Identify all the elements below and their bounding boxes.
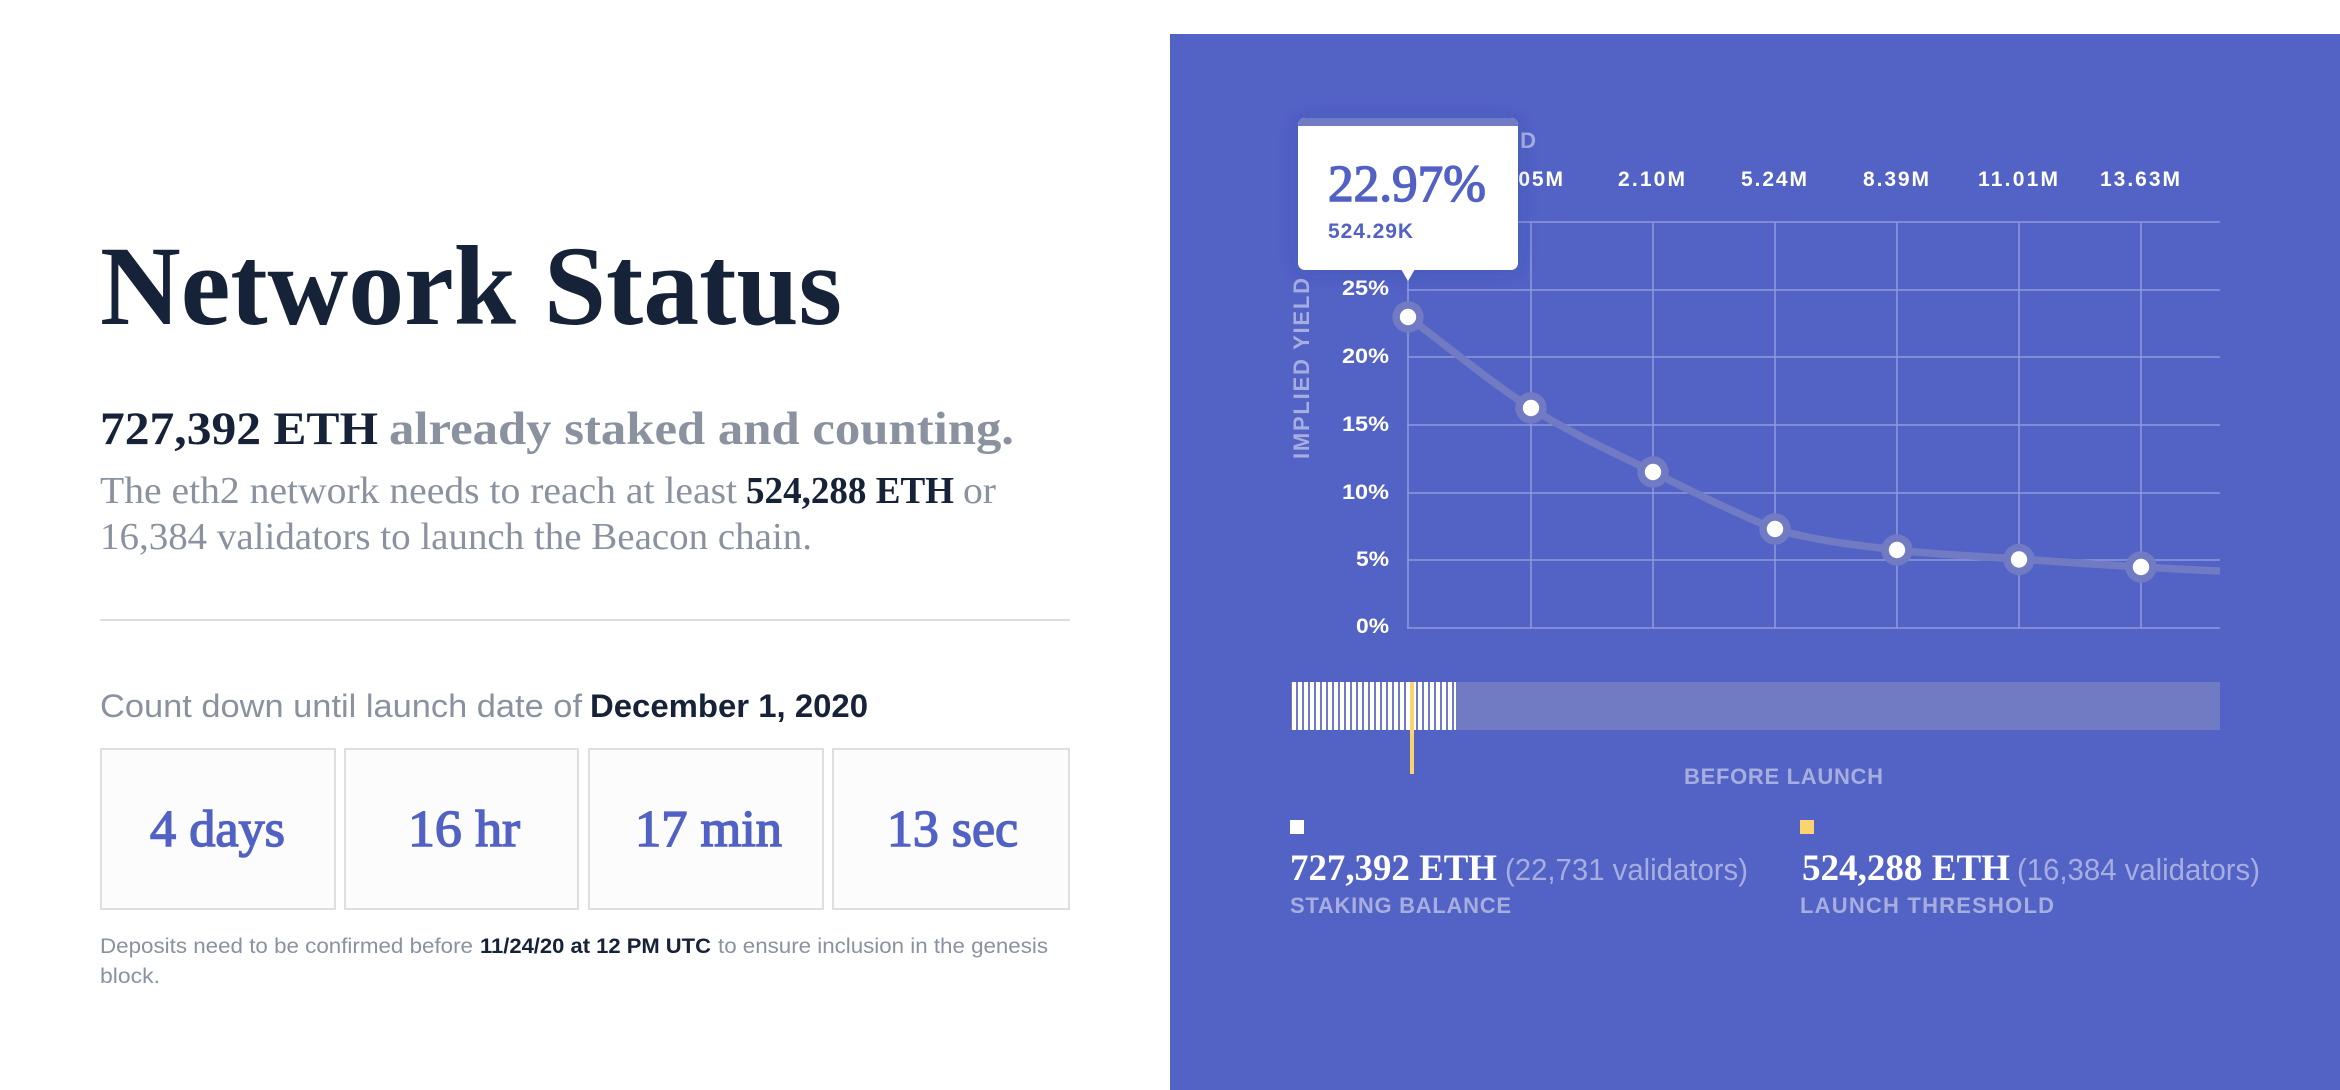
text block: deposit note: block. bbox=[100, 964, 160, 988]
text block: deposit note: to ensure inclusion in the genesis bbox=[718, 934, 1048, 958]
data points bbox=[1392, 301, 2157, 583]
countdown: minutes bbox=[589, 749, 823, 909]
legend: staking balance: 727,392 ETH bbox=[1290, 848, 1497, 889]
legend: staking balance: STAKING BALANCE bbox=[1290, 893, 1511, 918]
progress bar label: BEFORE LAUNCH bbox=[1684, 764, 1883, 789]
text block: deposit note bbox=[100, 934, 1048, 988]
panel: network status summary bbox=[100, 224, 1070, 988]
text block: deposit note: 11/24/20 at 12 PM UTC bbox=[480, 934, 711, 958]
countdown: seconds bbox=[833, 749, 1069, 909]
heading: countdown: Count down until launch date of bbox=[100, 688, 582, 724]
panel: yield chart bbox=[1170, 34, 2340, 1090]
legend: staking balance: (22,731 validators) bbox=[1505, 852, 1748, 887]
countdown: minutes: 17 min bbox=[635, 801, 782, 858]
text block: network requirement: 524,288 ETH bbox=[746, 470, 954, 512]
y axis labels: 0% bbox=[1356, 615, 1389, 638]
heading: staked amount: already staked and counting. bbox=[389, 403, 1014, 455]
y axis labels: 10% bbox=[1342, 481, 1389, 504]
text block: network requirement: or bbox=[963, 470, 996, 512]
legend: launch threshold: (16,384 validators) bbox=[2017, 852, 2260, 887]
legend: launch threshold: LAUNCH THRESHOLD bbox=[1800, 893, 2054, 918]
tooltip bbox=[1298, 118, 1518, 281]
y axis labels: 5% bbox=[1356, 548, 1389, 571]
heading: staked amount bbox=[100, 403, 1014, 455]
y axis labels: 15% bbox=[1342, 413, 1389, 436]
x axis labels: 5.24M bbox=[1741, 168, 1807, 191]
x axis labels bbox=[1497, 168, 2180, 191]
x axis title: TOTAL ETH STAKED bbox=[1300, 128, 1536, 153]
countdown: hours bbox=[345, 749, 578, 909]
y axis labels bbox=[1342, 277, 1389, 638]
tooltip: 524.29K bbox=[1328, 220, 1413, 243]
legend: staking balance bbox=[1290, 820, 1748, 918]
title: Network Status bbox=[100, 224, 842, 349]
legend: launch threshold: 524,288 ETH bbox=[1802, 848, 2010, 889]
heading: staked amount: 727,392 ETH bbox=[100, 403, 378, 455]
text block: network requirement: 16,384 validators to launch the Beacon chain. bbox=[100, 516, 812, 558]
countdown: hours: 16 hr bbox=[408, 801, 520, 858]
heading: countdown bbox=[100, 688, 868, 724]
countdown: days bbox=[101, 749, 335, 909]
countdown: seconds: 13 sec bbox=[887, 801, 1018, 858]
countdown: days: 4 days bbox=[150, 801, 285, 858]
legend: launch threshold bbox=[1800, 820, 2260, 918]
y axis labels: 25% bbox=[1342, 277, 1389, 300]
heading: countdown: December 1, 2020 bbox=[590, 688, 868, 724]
x axis labels: 1.05M bbox=[1497, 168, 1563, 191]
y axis title: IMPLIED YIELD bbox=[1289, 278, 1314, 459]
text block: network requirement bbox=[100, 470, 996, 558]
text block: deposit note: Deposits need to be confirmed before bbox=[100, 934, 473, 958]
progress bar: staked against threshold bbox=[1291, 682, 2220, 774]
x axis labels: 2.10M bbox=[1618, 168, 1685, 191]
tooltip: 22.97% bbox=[1328, 156, 1486, 213]
y axis labels: 20% bbox=[1342, 345, 1389, 368]
text block: network requirement: The eth2 network needs to reach at least bbox=[100, 470, 737, 512]
line chart: implied yield curve bbox=[1408, 317, 2220, 571]
x axis labels: 13.63M bbox=[2100, 168, 2180, 191]
x axis labels: 8.39M bbox=[1863, 168, 1929, 191]
x axis labels: 11.01M bbox=[1978, 168, 2058, 191]
